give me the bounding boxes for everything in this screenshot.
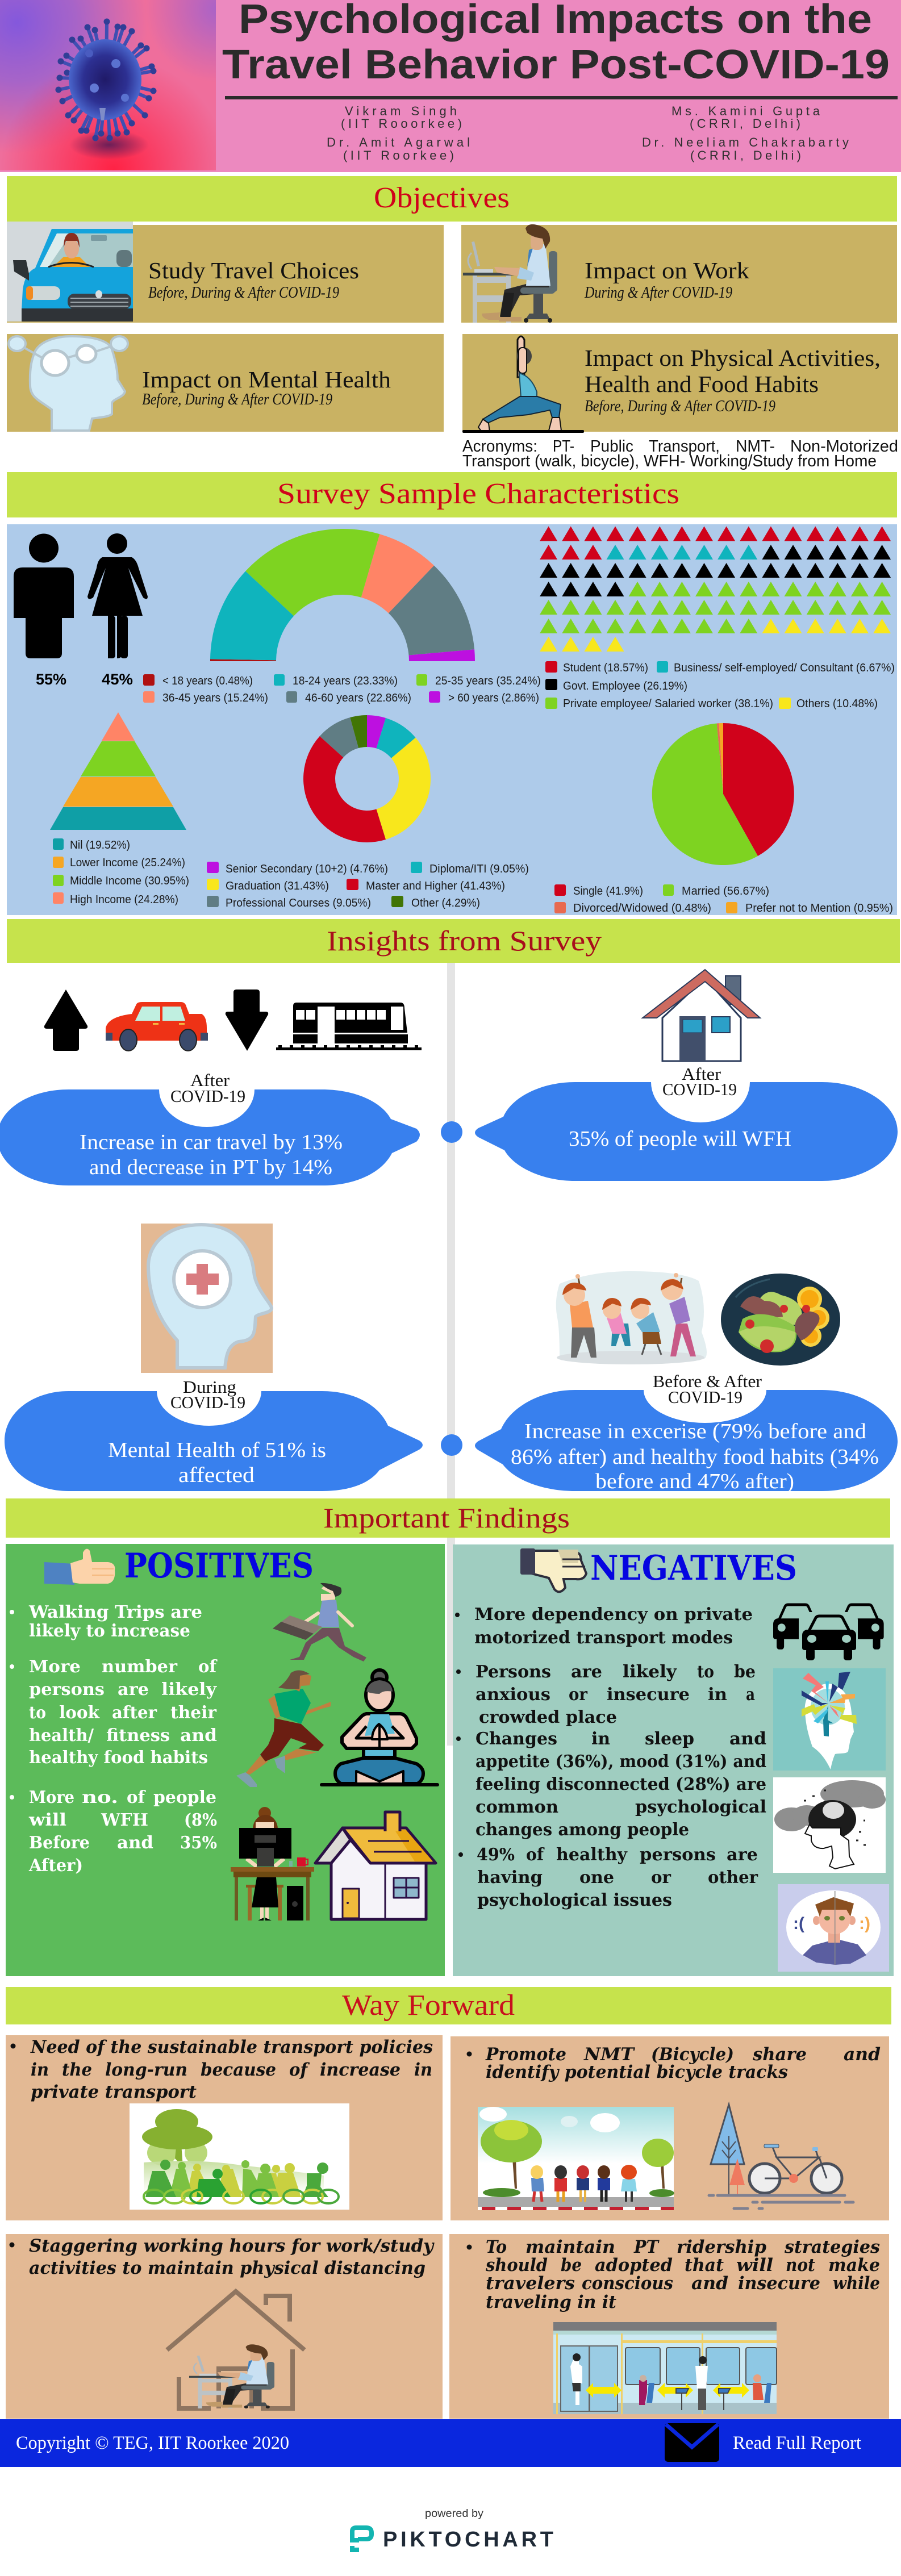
icon: anxious head (773, 1668, 886, 1771)
heading: Way Forward: Way Forward (342, 1989, 515, 2022)
card: maintain PT ridership: traveling in it (486, 2292, 617, 2312)
footer bar: Read Full Report (733, 2433, 861, 2453)
icon: three cars (773, 1605, 884, 1662)
negatives list: in (591, 1729, 610, 1749)
positives list: Before (29, 1833, 90, 1853)
positives list: persons (29, 1680, 105, 1700)
card: maintain PT ridership: not (786, 2255, 816, 2276)
card: maintain PT ridership: adopted (595, 2255, 673, 2276)
icon: red car (106, 1002, 208, 1051)
legend: occupation: Student (18.57%) (563, 662, 648, 674)
title (222, 0, 890, 87)
card: maintain PT ridership: should (485, 2255, 548, 2276)
negatives list: a (746, 1685, 755, 1705)
icon: house with worker (167, 2291, 304, 2408)
card: maintain PT ridership: will (736, 2255, 773, 2276)
legend: education: Senior Secondary (10+2) (4.76%) (226, 863, 388, 875)
positives list: number (102, 1657, 178, 1677)
card: maintain PT ridership: ridership (677, 2237, 766, 2257)
legend: education (207, 862, 529, 909)
acronyms note: PT- (553, 437, 574, 456)
icon: driver in blue car (7, 222, 133, 322)
image: virus on gradient (0, 0, 216, 170)
positives list: More (29, 1788, 74, 1807)
icon: woman at desk (231, 1807, 314, 1920)
card: sustainable transport policies: because (201, 2060, 276, 2080)
callout: car and PT: Increase in car travel by 13% (80, 1130, 343, 1154)
icon: yoga warrior pose (462, 336, 584, 433)
negatives list: motorized transport modes (474, 1628, 733, 1648)
positives list: and (180, 1726, 217, 1746)
positives list: after (112, 1703, 157, 1723)
icon: tree and bicycle (709, 2105, 853, 2208)
acronyms note: Non-Motorized (790, 437, 898, 456)
panel: survey characteristics (7, 524, 897, 915)
card: maintain PT ridership: while (833, 2273, 880, 2294)
insight: car and PT icons (44, 990, 422, 1051)
heading: Important Findings: Important Findings (323, 1502, 570, 1534)
card: sustainable transport policies: increase (320, 2060, 401, 2080)
callout: WFH: 35% of people will WFH (569, 1127, 791, 1151)
positives list: their (170, 1703, 217, 1723)
piktochart credit (352, 2508, 553, 2552)
card: Impact on Physical Activities: Impact on Physical Activities, (585, 345, 881, 371)
icon: man with mixed emotions: :( (793, 1914, 804, 1933)
card: promote NMT: identify potential bicycle tracks (486, 2062, 788, 2082)
legend: education: Other (4.29%) (411, 897, 480, 909)
negatives list: of (526, 1845, 545, 1865)
icon: person at desk (463, 224, 557, 323)
negatives list: common (475, 1797, 558, 1817)
positives list: of (198, 1657, 218, 1677)
positives list: (8% (184, 1810, 217, 1830)
panel: negatives: NEGATIVES (590, 1548, 797, 1588)
card: promote NMT: and (844, 2044, 881, 2065)
callout: exercise and food (475, 1371, 898, 1493)
heading: Insights from Survey (7, 919, 900, 963)
negatives list: More dependency on private (474, 1605, 753, 1625)
acronyms note: Transport (walk, bicycle), WFH- Working/Study from Home (462, 452, 877, 470)
legend: occupation: Govt. Employee (26.19%) (563, 680, 687, 692)
legend: occupation: Others (10.48%) (796, 698, 878, 710)
positives list: and (117, 1833, 153, 1853)
legend: education: Master and Higher (41.43%) (366, 880, 505, 892)
icon: thumbs up (44, 1549, 115, 1585)
heading: Objectives: Objectives (374, 182, 510, 214)
card: sustainable transport policies: long-run (105, 2060, 187, 2080)
negatives list: changes among people (475, 1820, 689, 1840)
card: Impact on Work: Impact on Work (585, 257, 750, 283)
negatives list: appetite (36%), mood (31%) and (475, 1752, 766, 1772)
header band (0, 0, 901, 172)
callout: car and PT (0, 1070, 420, 1185)
positives list: More (29, 1657, 81, 1677)
negatives list: to (697, 1662, 714, 1682)
callout: car and PT: After (190, 1070, 230, 1090)
negatives list: feeling disconnected (28%) are (475, 1775, 766, 1794)
negatives list: anxious (475, 1685, 550, 1705)
icon: salad plate (721, 1274, 840, 1366)
card: promote NMT (450, 2036, 889, 2220)
legend: age: 25-35 years (35.24%) (435, 675, 541, 687)
card: promote NMT: Promote (485, 2044, 566, 2065)
piktochart credit: powered by (425, 2508, 484, 2520)
chart: income pyramid (50, 712, 186, 830)
negatives list: Persons (475, 1662, 551, 1682)
icon: walking man (273, 1583, 366, 1661)
icon: man with mixed emotions (778, 1884, 889, 1972)
chart: age semi-donut (210, 529, 475, 661)
negatives list: insecure (607, 1685, 690, 1705)
positives list: will (28, 1810, 66, 1830)
chart: occupation triangle pictogram (540, 526, 891, 652)
panel: positives: POSITIVES (124, 1546, 314, 1586)
negatives list: healthy (556, 1845, 628, 1865)
negatives list: likely (623, 1662, 678, 1682)
icon: train (276, 1003, 422, 1050)
legend: age: 18-24 years (23.33%) (293, 675, 398, 687)
positives list: of (127, 1788, 146, 1807)
heading: Important Findings (6, 1498, 890, 1538)
authors: (CRRI, Delhi) (690, 148, 801, 162)
card: Impact on Physical Activities: Health and Food Habits (585, 371, 819, 397)
card: sustainable transport policies: in (31, 2060, 49, 2080)
authors: (IIT Rooorkee) (341, 116, 462, 131)
negatives list (455, 1605, 766, 1910)
icon: family exercising (556, 1271, 707, 1364)
acronyms note: Public (590, 437, 633, 456)
authors: Dr. Amit Agarwal (327, 135, 470, 149)
card: Impact on Mental Health (7, 334, 444, 432)
legend: marital status: Single (41.9%) (573, 885, 643, 897)
image: cyclists and trees (130, 2103, 349, 2210)
icon: yellow-roof house (315, 1812, 436, 1919)
positives list: are (118, 1680, 149, 1700)
image: kids on a sidewalk (478, 2107, 674, 2210)
icon: up arrow (44, 990, 87, 1051)
card: maintain PT ridership: and (691, 2273, 728, 2294)
negatives list: one (579, 1868, 614, 1888)
legend: age: > 60 years (2.86%) (448, 692, 539, 704)
legend: age: 36-45 years (15.24%) (162, 692, 268, 704)
card: Study Travel Choices (7, 222, 444, 323)
card: sustainable transport policies (6, 2035, 443, 2220)
legend: income (53, 838, 189, 906)
icon: thumbs down (520, 1548, 586, 1592)
callout: exercise and food: COVID-19 (668, 1387, 743, 1407)
icon: woman 45%: 45% (102, 671, 133, 688)
positives list: to (29, 1703, 46, 1723)
negatives list: are (571, 1662, 602, 1682)
card: Impact on Mental Health: Impact on Mental Health (142, 366, 391, 393)
authors: Ms. Kamini Gupta (671, 104, 820, 118)
positives list: Walking Trips are (28, 1602, 202, 1622)
legend: income: Middle Income (30.95%) (70, 875, 189, 887)
card: maintain PT ridership: To (486, 2237, 507, 2257)
footer bar: Copyright © TEG, IIT Roorkee 2020 (16, 2433, 289, 2453)
card: staggering working hours: Staggering working hours for work/study (29, 2236, 435, 2256)
positives list: likely to increase (29, 1621, 190, 1641)
negatives list: 49% (477, 1845, 515, 1865)
callout: exercise and food: before and 47% after) (595, 1469, 794, 1493)
negatives list: be (734, 1662, 756, 1682)
authors (327, 104, 849, 162)
negatives list: persons (640, 1845, 716, 1865)
authors: (IIT Roorkee) (343, 148, 454, 162)
negatives list: Changes (475, 1729, 557, 1749)
icon: man 55% (14, 534, 74, 688)
icon: man with mixed emotions: :) (859, 1914, 870, 1933)
card: sustainable transport policies: of (289, 2060, 310, 2080)
positives list: health/ (29, 1726, 94, 1746)
callout: WFH: After (682, 1064, 721, 1084)
image: bus interior with distancing (553, 2322, 777, 2414)
positives list: look (59, 1703, 100, 1723)
legend: marital status (554, 884, 893, 915)
negatives list: or (651, 1868, 671, 1888)
callout: car and PT: and decrease in PT by 14% (89, 1155, 332, 1179)
callout: exercise and food: Increase in excerise (79% before and (524, 1419, 866, 1443)
callout: WFH: COVID-19 (662, 1079, 737, 1099)
footer bar (0, 2419, 901, 2467)
positives list (10, 1602, 218, 1876)
legend: occupation (545, 661, 895, 710)
icon: piktochart logo (352, 2528, 372, 2550)
card: staggering working hours: activities to maintain physical distancing (29, 2258, 426, 2278)
negatives list: psychological (635, 1797, 766, 1817)
callout: mental health (5, 1377, 423, 1491)
legend: marital status: Prefer not to Mention (0.95%) (745, 902, 893, 915)
card: sustainable transport policies: Need of the sustainable transport policies (30, 2037, 433, 2057)
legend: income: High Income (24.28%) (70, 894, 178, 906)
panel: positives (6, 1544, 445, 1976)
authors: (CRRI, Delhi) (690, 116, 800, 131)
legend: income: Nil (19.52%) (70, 839, 130, 851)
card: Impact on Mental Health: Before, During & After COVID-19 (142, 391, 332, 408)
card: promote NMT: (Bicycle) (651, 2044, 734, 2065)
callout: mental health: affected (178, 1463, 255, 1487)
card: maintain PT ridership: make (828, 2255, 880, 2276)
icon: woman 45% (87, 533, 148, 688)
negatives list: crowded place (479, 1707, 617, 1727)
card: maintain PT ridership: insecure (738, 2273, 820, 2294)
heading: Way Forward (6, 1987, 891, 2024)
card: Impact on Physical Activities: Before, During & After COVID-19 (585, 398, 775, 415)
callout: car and PT: COVID-19 (170, 1086, 245, 1106)
legend: income: Lower Income (25.24%) (70, 857, 185, 869)
callout: exercise and food: Before & After (653, 1371, 762, 1391)
negatives list: or (569, 1685, 588, 1705)
heading: Insights from Survey: Insights from Survey (327, 925, 602, 957)
card: sustainable transport policies: the (62, 2060, 92, 2080)
chart: education donut (303, 715, 431, 842)
callout: mental health: COVID-19 (170, 1392, 245, 1412)
piktochart credit: PIKTOCHART (383, 2528, 553, 2552)
title: Travel Behavior Post-COVID-19 (222, 42, 890, 87)
negatives list: having (477, 1868, 543, 1888)
card: maintain PT ridership: travelers (486, 2273, 575, 2294)
negatives list: psychological issues (477, 1890, 672, 1910)
acronyms note: Transport, (649, 437, 720, 456)
icon: house WFH (643, 970, 760, 1061)
card: Study Travel Choices: Study Travel Choices (148, 257, 359, 283)
legend: education: Graduation (31.43%) (226, 880, 329, 892)
negatives list: in (708, 1685, 727, 1705)
icon: man 55%: 55% (36, 671, 66, 688)
acronyms note: Acronyms: (462, 437, 537, 456)
heading: Survey Sample Characteristics: Survey Sample Characteristics (277, 478, 679, 510)
negatives list: and (729, 1729, 766, 1749)
legend: age (143, 674, 541, 704)
acronyms note: NMT- (736, 437, 775, 456)
icon: head with medical cross (141, 1224, 273, 1373)
positives list: After) (28, 1856, 83, 1876)
callout: mental health: Mental Health of 51% is (108, 1438, 326, 1462)
icon: head with cloud (773, 1777, 886, 1873)
positives list: likely (161, 1680, 218, 1700)
card: maintain PT ridership: be (561, 2255, 582, 2276)
card: maintain PT ridership: PT (633, 2237, 660, 2257)
negatives list: sleep (645, 1729, 694, 1749)
card: promote NMT: share (752, 2044, 807, 2065)
icon: down arrow (226, 990, 268, 1051)
positives list: people (153, 1788, 216, 1807)
card: Impact on Work (461, 224, 897, 323)
card: maintain PT ridership (449, 2234, 889, 2419)
acronyms note (462, 437, 898, 470)
authors: Dr. Neeliam Chakrabarty (642, 135, 849, 149)
callout: mental health: During (183, 1377, 236, 1397)
authors: Vikram Singh (345, 104, 457, 118)
legend: age: < 18 years (0.48%) (162, 675, 253, 687)
card: sustainable transport policies: in (414, 2060, 432, 2080)
callout: exercise and food: 86% after) and healthy food habits (34% (511, 1445, 879, 1469)
icon: meditating woman (322, 1670, 437, 1785)
legend: education: Professional Courses (9.05%) (226, 897, 371, 909)
card: sustainable transport policies: private transport (31, 2082, 197, 2102)
card: maintain PT ridership: maintain (525, 2237, 615, 2257)
card: Impact on Physical Activities (462, 334, 898, 433)
positives list: healthy food habits (29, 1748, 208, 1768)
legend: marital status: Married (56.67%) (682, 885, 769, 897)
card: maintain PT ridership: conscious (582, 2273, 673, 2294)
legend: marital status: Divorced/Widowed (0.48%) (573, 902, 711, 915)
legend: occupation: Private employee/ Salaried worker (38.1%) (563, 698, 773, 710)
heading: Survey Sample Characteristics (7, 472, 897, 517)
card: maintain PT ridership: that (685, 2255, 724, 2276)
positives list: WFH (101, 1810, 148, 1830)
card: Study Travel Choices: Before, During & After COVID-19 (148, 284, 339, 302)
panel: negatives (453, 1544, 894, 1976)
card: Impact on Work: During & After COVID-19 (584, 284, 732, 302)
callout: WFH (475, 1064, 898, 1181)
legend: occupation: Business/ self-employed/ Consultant (6.67%) (674, 662, 895, 674)
legend: education: Diploma/ITI (9.05%) (429, 863, 529, 875)
icon: head with glasses (9, 336, 128, 431)
positives list: no. (82, 1788, 118, 1807)
card: promote NMT: NMT (583, 2044, 635, 2065)
legend: age: 46-60 years (22.86%) (305, 692, 411, 704)
negatives list: are (727, 1845, 758, 1865)
icon: envelope (665, 2423, 719, 2462)
heading: Objectives (7, 176, 897, 222)
icon: running woman (236, 1670, 331, 1787)
positives list: fitness (106, 1726, 170, 1746)
card: maintain PT ridership: strategies (784, 2237, 880, 2257)
positives list: 35% (180, 1833, 217, 1853)
negatives list: other (708, 1868, 758, 1888)
card: staggering working hours (6, 2234, 443, 2419)
chart: marital status pie (652, 723, 794, 865)
